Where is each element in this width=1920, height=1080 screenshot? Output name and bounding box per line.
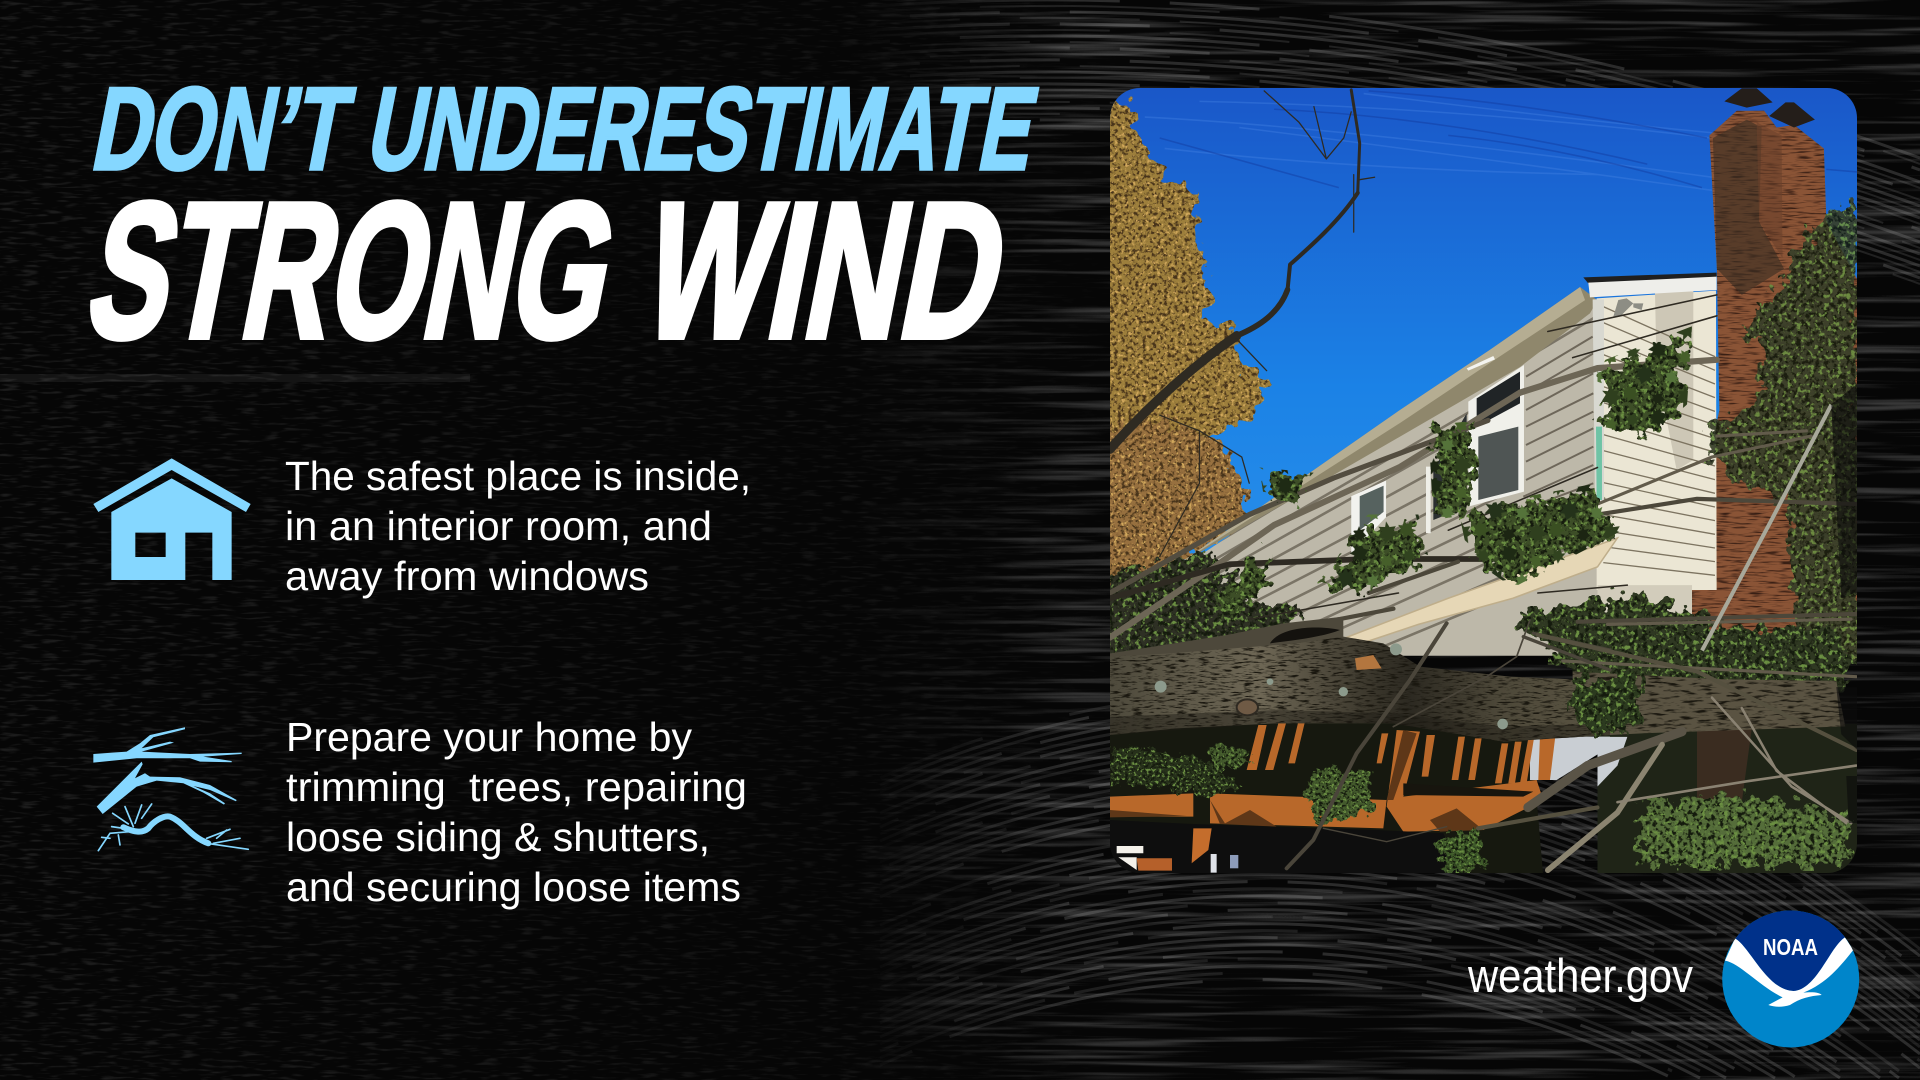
- right edge dark streaks: [1831, 384, 1857, 823]
- branch knot: [1237, 699, 1258, 715]
- branches crossing trunk: [1287, 620, 1610, 868]
- dark background under trunk: [1110, 720, 1543, 877]
- security light: [1613, 298, 1643, 317]
- wall and brick below wing: [1598, 585, 1692, 614]
- trunk and deck: [1110, 617, 1610, 877]
- exposed wood patch: [1355, 655, 1382, 670]
- title line: Don't Underestimate: DON’T: [84, 64, 361, 195]
- text block: home preparation advice: and securing loose items: [286, 864, 741, 910]
- text block: home preparation advice: [286, 714, 747, 910]
- title line: Strong Wind: STRONG: [74, 164, 633, 379]
- deck shadow: [1110, 730, 1483, 832]
- logo wordmark: NOAA: [1763, 934, 1818, 960]
- text block: shelter advice: [285, 453, 751, 599]
- trunk shadow: [1110, 710, 1610, 742]
- text block: shelter advice: The safest place is inside,: [285, 453, 751, 499]
- text block: shelter advice: away from windows: [285, 553, 649, 599]
- lower green plants: [1637, 794, 1846, 865]
- mid lower dark mass behind branches: [1513, 593, 1846, 687]
- text block: home preparation advice: Prepare your home by: [286, 714, 692, 760]
- title: [74, 64, 1047, 379]
- leaves under trunk: [1210, 747, 1477, 870]
- upper limb: [1110, 617, 1343, 663]
- dark ground: [1598, 724, 1861, 875]
- deck rails: [1110, 722, 1555, 832]
- limb hollow: [1270, 628, 1340, 643]
- wall next to eave: [1520, 339, 1595, 508]
- text block: home preparation advice: trimming trees, repairing: [286, 764, 747, 810]
- sky wind streaks: [1145, 91, 1857, 190]
- split wood: [1346, 538, 1617, 643]
- branch sprays: [1478, 635, 1856, 870]
- right dark foliage mass: [1704, 196, 1866, 661]
- left house wall: [1184, 287, 1598, 656]
- small window: [1351, 481, 1386, 554]
- logo: NOAA: [1720, 903, 1863, 1048]
- house right side detail: [1426, 273, 1717, 590]
- leaf clusters: green blotches: [1212, 337, 1682, 619]
- white trim: [1583, 273, 1717, 283]
- website label: weather.gov: [1467, 949, 1693, 1002]
- title line: Strong Wind: WIND: [629, 164, 1024, 379]
- icon: broken tree branches: [93, 727, 248, 851]
- lower right ground and trunk end: [1573, 671, 1861, 875]
- photo: fallen tree on house: [1100, 88, 1866, 877]
- dark foliage at left under branches: [1100, 551, 1299, 661]
- icon: house: [93, 458, 251, 580]
- deck dark slot: [1403, 783, 1533, 797]
- siding beside deck: [1598, 737, 1627, 787]
- title line: Don't Underestimate: UNDERESTIMATE: [359, 64, 1047, 195]
- far trunk section: [1573, 671, 1845, 737]
- fallen trunk: [1110, 637, 1610, 742]
- leaf clusters: leaf shapes: [1259, 326, 1692, 598]
- main window: [1468, 365, 1524, 507]
- foliage and branches over lower right: [1478, 384, 1857, 870]
- chimney: [1692, 88, 1857, 661]
- metal pole: [1702, 405, 1831, 651]
- logo sky area and white gull: [1720, 903, 1863, 1007]
- title line: Don't Underestimate: [84, 64, 1047, 195]
- dark leaves left of deck: [1110, 747, 1243, 797]
- bottom leaves: [1437, 830, 1487, 870]
- bottom shadow band: [1110, 820, 1463, 877]
- autumn tree upper foliage: [1100, 91, 1269, 436]
- logo circle: [1722, 910, 1859, 1048]
- bright wing: [1597, 291, 1717, 590]
- branches and foliage over house: [1100, 90, 1866, 750]
- leaves over trunk gap: [1573, 671, 1642, 734]
- autumn tree lower foliage: [1100, 420, 1249, 593]
- text block: shelter advice: in an interior room, and: [285, 503, 712, 549]
- soffit: [1175, 287, 1598, 567]
- tree limbs: [1110, 88, 1857, 678]
- text block: home preparation advice: loose siding & shutters,: [286, 814, 710, 860]
- siding behind deck: [1530, 737, 1610, 780]
- chimney base: [1697, 729, 1752, 802]
- sky: [1110, 88, 1857, 588]
- lichen spots: [1155, 643, 1508, 729]
